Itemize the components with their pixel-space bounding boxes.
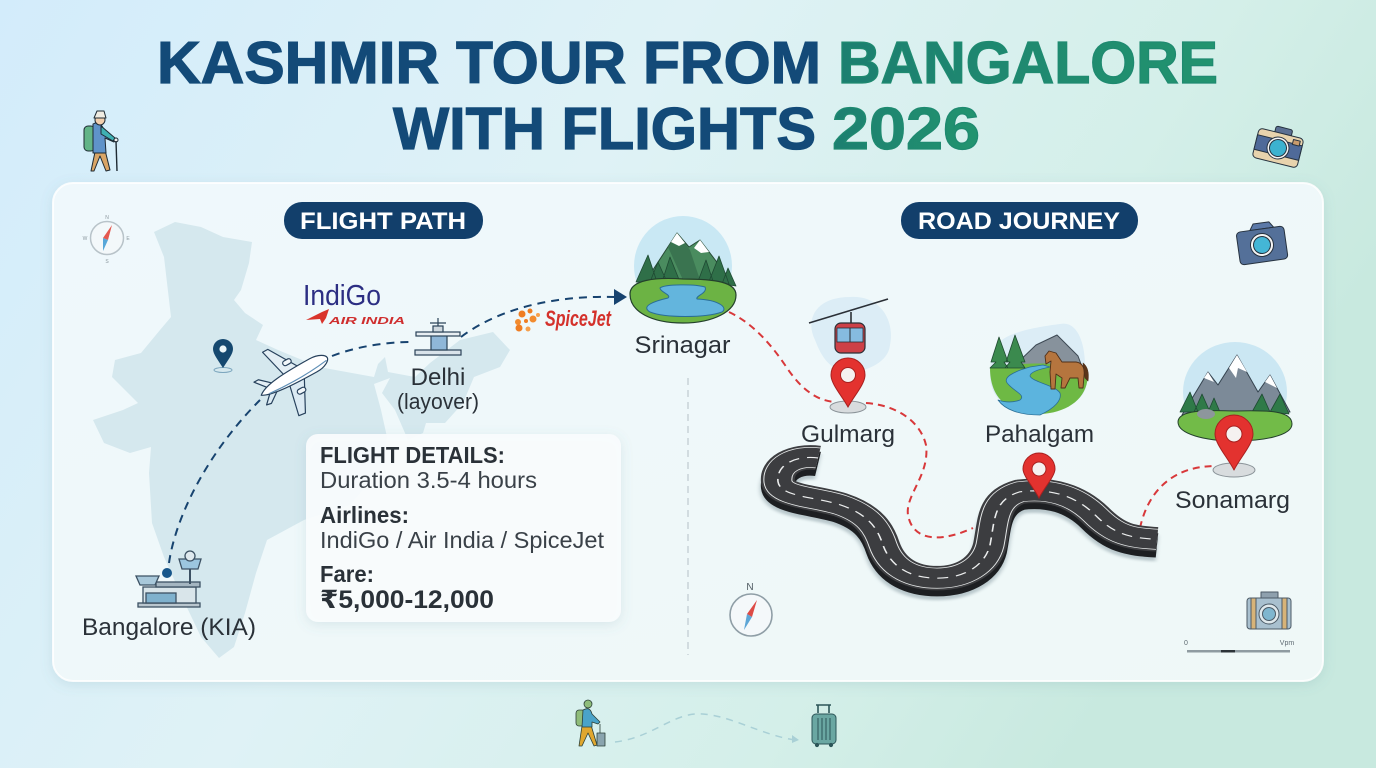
arrow head (614, 289, 627, 305)
title (157, 30, 1218, 162)
icon: traveller with luggage (576, 700, 605, 746)
label: Delhi: Delhi (411, 364, 465, 391)
scene: Gulmarg gondola and pin (809, 297, 891, 413)
marker: Bangalore start dot (162, 568, 172, 578)
label: Delhi (397, 364, 479, 414)
title: 2026 (832, 96, 980, 162)
icon: suitcase (812, 705, 836, 747)
panel: flight details: IndiGo / Air India / SpiceJet (320, 527, 605, 553)
scene: Srinagar (630, 216, 736, 323)
label: Gulmarg: Gulmarg (801, 421, 895, 448)
panel: flight details: Fare: (320, 561, 374, 587)
scene: Sonamarg (1178, 342, 1292, 477)
scene: Pahalgam (990, 324, 1088, 415)
label: Bangalore: Bangalore (KIA) (82, 614, 256, 641)
scale bar: 0 (1184, 640, 1188, 647)
label: Pahalgam: Pahalgam (985, 421, 1094, 448)
icon: airplane (243, 326, 346, 428)
airline logos: IndiGo (303, 280, 381, 312)
panel: flight details: FLIGHT DETAILS: (320, 442, 505, 468)
icon: compass top left: N (105, 215, 109, 221)
icon: compass lower (730, 582, 772, 636)
dashed journey line (615, 714, 795, 742)
icon: compass top left (83, 215, 130, 265)
airline logos: AIR INDIA (327, 316, 405, 327)
flight route dashed line (169, 297, 615, 563)
airline logos: SpiceJet (545, 306, 612, 331)
icon: airport tower delhi (415, 318, 461, 355)
airline logos (303, 280, 612, 332)
icon: hiker (84, 111, 118, 171)
heading: flight path: FLIGHT PATH (300, 208, 466, 235)
panel: flight details (306, 434, 621, 622)
label: Sonamarg: Sonamarg (1175, 487, 1290, 514)
label: Delhi: (layover) (397, 389, 479, 414)
icon: compass lower: N (746, 582, 754, 593)
heading: flight path (284, 202, 483, 239)
panel: flight details: Duration 3.5-4 hours (320, 467, 537, 493)
icon: compass top left: W (83, 236, 88, 242)
title: KASHMIR TOUR FROM (157, 30, 821, 96)
heading: road journey (901, 202, 1138, 239)
panel: flight details: ₹5,000-12,000 (320, 586, 494, 614)
scale bar (1184, 640, 1294, 652)
scale bar: Vpm (1280, 640, 1294, 647)
icon: camera top right (1252, 122, 1305, 168)
map: India silhouette (93, 222, 510, 658)
icon: camera in panel (1235, 220, 1288, 265)
road illustration (778, 457, 1157, 587)
road route dashed red (729, 312, 1216, 537)
pin: Pahalgam (1023, 453, 1055, 498)
panel: main card (53, 183, 1323, 681)
heading: road journey: ROAD JOURNEY (918, 208, 1120, 235)
title: BANGALORE (838, 30, 1218, 96)
arrow head bottom (792, 735, 799, 743)
icon: Bangalore airport (136, 551, 201, 607)
icon: compass top left: E (126, 236, 130, 242)
icon: location pin blue (213, 339, 233, 372)
label: Srinagar: Srinagar (634, 332, 731, 359)
icon: compass top left: S (105, 259, 109, 265)
panel: flight details: Airlines: (320, 502, 409, 528)
icon: camera bag (1247, 592, 1291, 629)
title: WITH FLIGHTS (393, 96, 816, 162)
